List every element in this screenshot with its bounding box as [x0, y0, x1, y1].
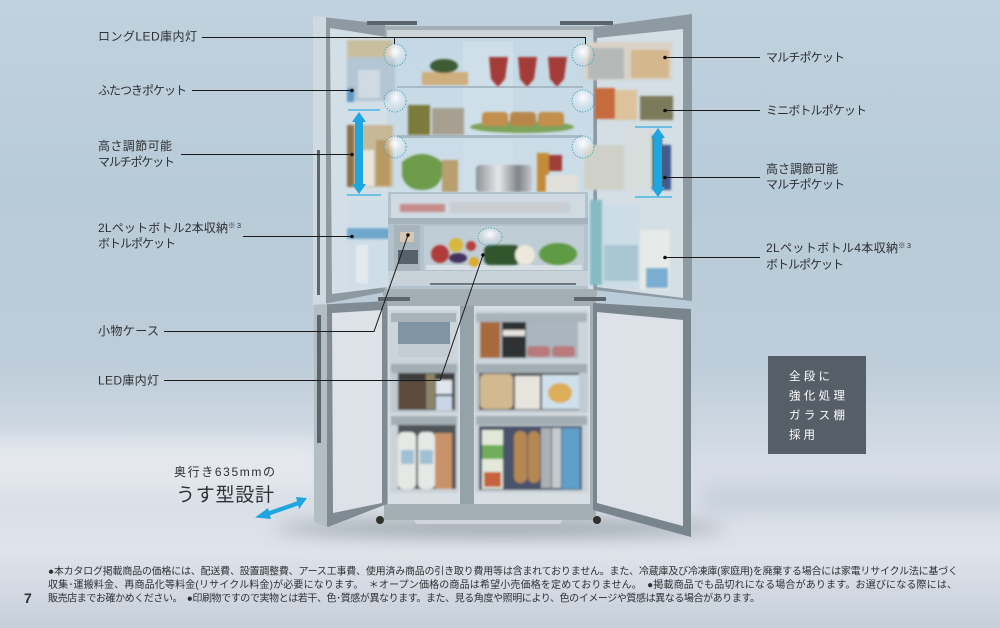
food: sandwich plate [470, 112, 574, 133]
height adjust arrow left [347, 110, 381, 195]
label: 2L bottle pocket: ボトルポケット [98, 236, 176, 250]
page number: 7 [24, 590, 32, 606]
labels left [98, 30, 241, 388]
refrigerator [313, 14, 692, 537]
slim design heading [174, 465, 275, 506]
label: adjustable multi pocket right: マルチポケット [766, 178, 845, 192]
shelves and food [397, 57, 583, 192]
fridge body upper [383, 26, 597, 296]
callout: tempered glass shelves [768, 356, 866, 454]
label: 2L bottle pocket: 2Lペットボトル2本収納 [98, 220, 228, 235]
labels right [766, 50, 911, 272]
callout: tempered glass shelves: 強化処理 [789, 388, 846, 402]
food: salad bowl [402, 154, 442, 190]
label: 2L bottle pocket right: 2Lペットボトル4本収納 [766, 240, 898, 255]
leader lines [164, 38, 760, 380]
label: mini bottle pocket: ミニボトルポケット [766, 104, 867, 118]
label: adjustable multi pocket right [766, 162, 845, 192]
callout: tempered glass shelves: 全段に [789, 369, 830, 383]
footnotes [48, 564, 958, 604]
fridge body lower [384, 290, 596, 524]
label: long LED: ロングLED庫内灯 [98, 30, 197, 44]
LED lights [384, 44, 594, 246]
label: small case: 小物ケース [98, 324, 159, 338]
slim design heading: うす型設計 [176, 484, 274, 506]
label: adjustable multi pocket right: 高さ調節可能 [766, 162, 838, 176]
food: appetizer tray [422, 59, 468, 85]
freezer drawers left [389, 310, 458, 493]
label: LED light: LED庫内灯 [98, 374, 159, 388]
label: 2L bottle pocket: ※3 [228, 221, 241, 230]
arrow: depth [255, 497, 307, 519]
hinges and feet [367, 21, 613, 524]
label: adjustable multi pocket [98, 139, 175, 169]
vegetables [431, 238, 577, 267]
lower left door [314, 301, 387, 527]
freezer drawers right [475, 310, 588, 493]
label: 2L bottle pocket [98, 220, 241, 250]
label: 2L bottle pocket right: ボトルポケット [766, 258, 844, 272]
label: multi pocket: マルチポケット [766, 50, 845, 64]
food: red desserts [489, 57, 567, 86]
footnotes: ●本カタログ掲載商品の価格には、配送費、設置調整費、アース工事費、使用済み商品の引き取り費用等は含まれておりません。また、冷蔵庫及び冷凍庫(家庭用)を廃棄する場合には家電リサイクル法に基づく [48, 564, 958, 578]
label: 2L bottle pocket right: ※3 [898, 241, 911, 250]
label: adjustable multi pocket: マルチポケット [98, 155, 175, 169]
label: lidded pocket: ふたつきポケット [98, 84, 187, 98]
food: bottle [442, 160, 458, 192]
middle drawer and vegetable case [388, 192, 588, 289]
slim design heading: 奥行き635mmの [174, 465, 275, 479]
callout: tempered glass shelves: 採用 [789, 428, 815, 442]
label: 2L bottle pocket right [766, 240, 911, 272]
food: silver pot [476, 165, 532, 192]
left door pockets contents [347, 40, 395, 287]
footnotes: 販売店までお確かめください。 ●印刷物ですので実物とは若干、色･質感が異なります。また、見る角度や照明により、色のイメージや質感は異なる場合があります。 [48, 592, 760, 604]
callout: tempered glass shelves: ガラス棚 [789, 408, 845, 422]
upper right door [584, 14, 692, 301]
lower right door [593, 303, 691, 537]
label: adjustable multi pocket: 高さ調節可能 [98, 139, 172, 153]
height adjust arrow right [635, 127, 672, 197]
footnotes: 収集･運搬料金、再商品化等料金(リサイクル料金)が必要になります。 ＊オープン価格の商品は希望小売価格を定めておりません。 ●掲載商品でも品切れになる場合があります。お選びになる際には、 [48, 578, 957, 591]
upper left door [313, 16, 395, 306]
food: jars right [537, 153, 578, 192]
food: jars [408, 105, 464, 135]
